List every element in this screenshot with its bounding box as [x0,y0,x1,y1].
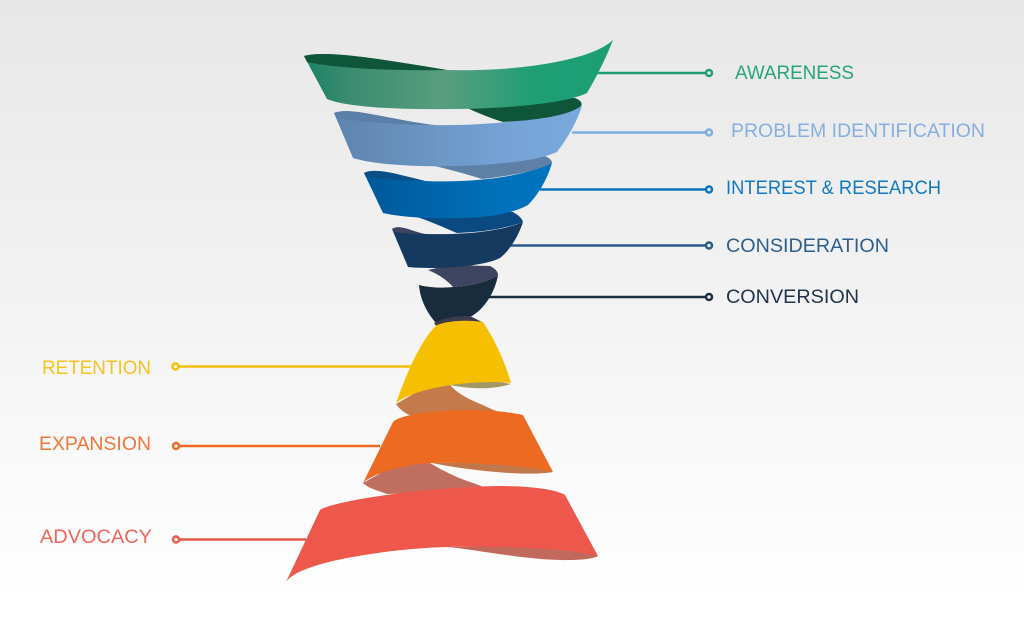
label: problem identification: PROBLEM IDENTIFICATION [731,120,985,142]
label: conversion: CONVERSION [726,286,859,308]
funnel stage: advocacy [286,486,598,582]
funnel stage: problem identification [334,106,582,179]
funnel stage: retention [396,321,511,416]
leader lines and endpoint markers [172,70,712,542]
funnel stage: interest and research [364,163,552,233]
funnel stage: awareness [304,40,613,122]
label: interest and research: INTEREST & RESEARCH [726,177,941,199]
label: consideration: CONSIDERATION [726,235,889,257]
funnel stage: consideration [392,222,523,287]
label: awareness: AWARENESS [735,62,854,84]
label: advocacy: ADVOCACY [40,526,152,548]
funnel stage: conversion [419,275,498,327]
funnel stage: expansion [363,410,553,494]
label: expansion: EXPANSION [39,433,151,455]
label: retention: RETENTION [42,357,151,379]
